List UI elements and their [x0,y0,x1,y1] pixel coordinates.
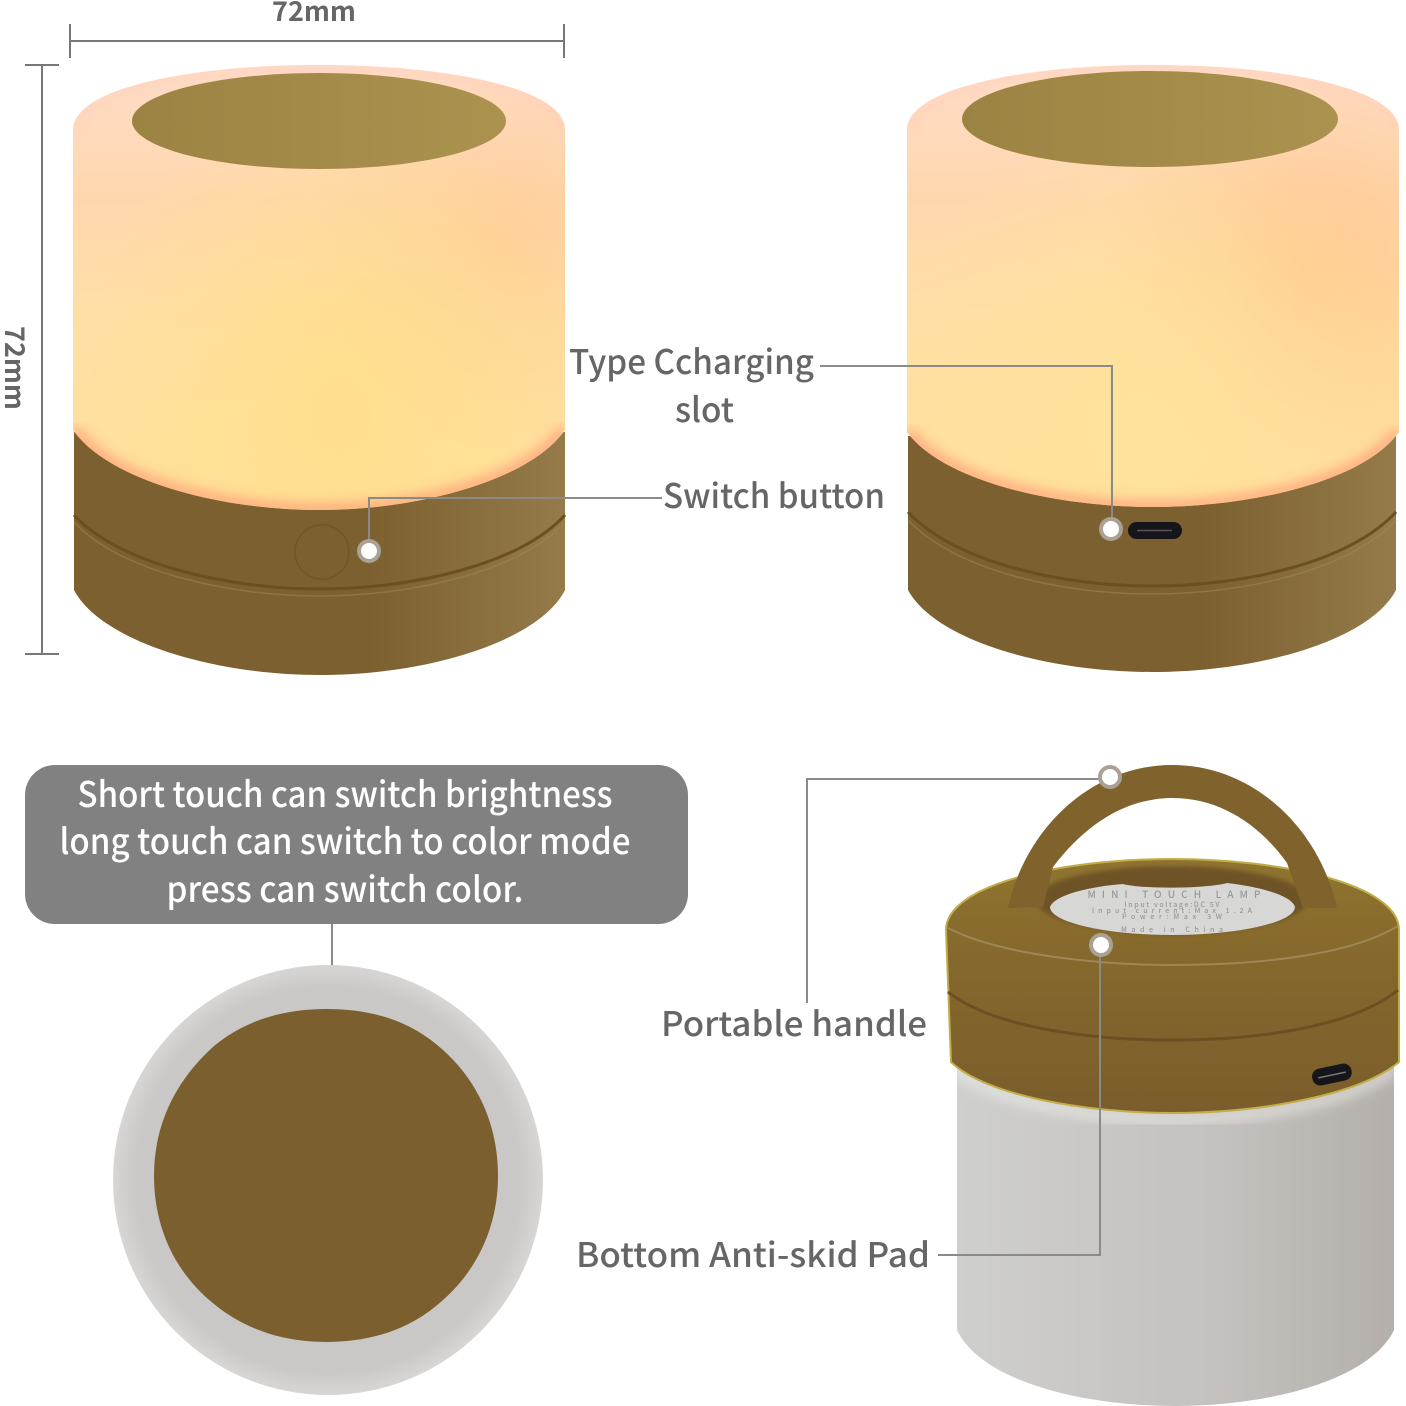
callout: Type C charging slot: slot [675,383,734,432]
lamp: upside-down view with handle [946,765,1399,1406]
lamp: rear view with charging port [907,65,1399,672]
callout: bottom anti-skid pad: Bottom Anti-skid Pad [576,1228,930,1277]
callout: portable handle: Portable handle [661,997,927,1046]
dimension: width 72mm [70,0,564,58]
note: touch instructions: long touch can switch to color mode [60,814,630,865]
callout: Type C charging slot: Type Ccharging [569,335,814,384]
lamp top recess [962,71,1338,167]
callout: bottom anti-skid pad [576,935,1111,1277]
lamp body top [946,859,1399,1113]
callout: Type C charging slot [569,335,1121,539]
product label: MINI TOUCH LAMP [1088,886,1261,901]
callout: switch button: Switch button [663,469,885,518]
note: touch instructions: press can switch color. [166,862,524,913]
handle [1008,765,1337,908]
dimension: height 72mm [0,65,59,654]
lamp: bottom view [113,965,543,1395]
product label: Input voltage:DC 5V [1124,900,1220,910]
top recess [1036,866,1308,934]
touch switch ring [295,525,349,579]
lamp: front view with switch button [73,65,565,675]
callout: portable handle [661,767,1120,1046]
callout: switch button [359,469,885,561]
icon: USB-C port [1128,522,1182,539]
product label [1050,883,1295,935]
icon: USB-C port [1311,1062,1353,1087]
product label: Made in China [1121,925,1223,935]
note: touch instructions [25,765,688,966]
product label: Input current:Max 1.2A [1092,906,1253,916]
product label: Power:Max 3W [1122,912,1223,922]
note: touch instructions: Short touch can switch brightness [78,767,612,818]
lamp top recess [132,73,506,169]
